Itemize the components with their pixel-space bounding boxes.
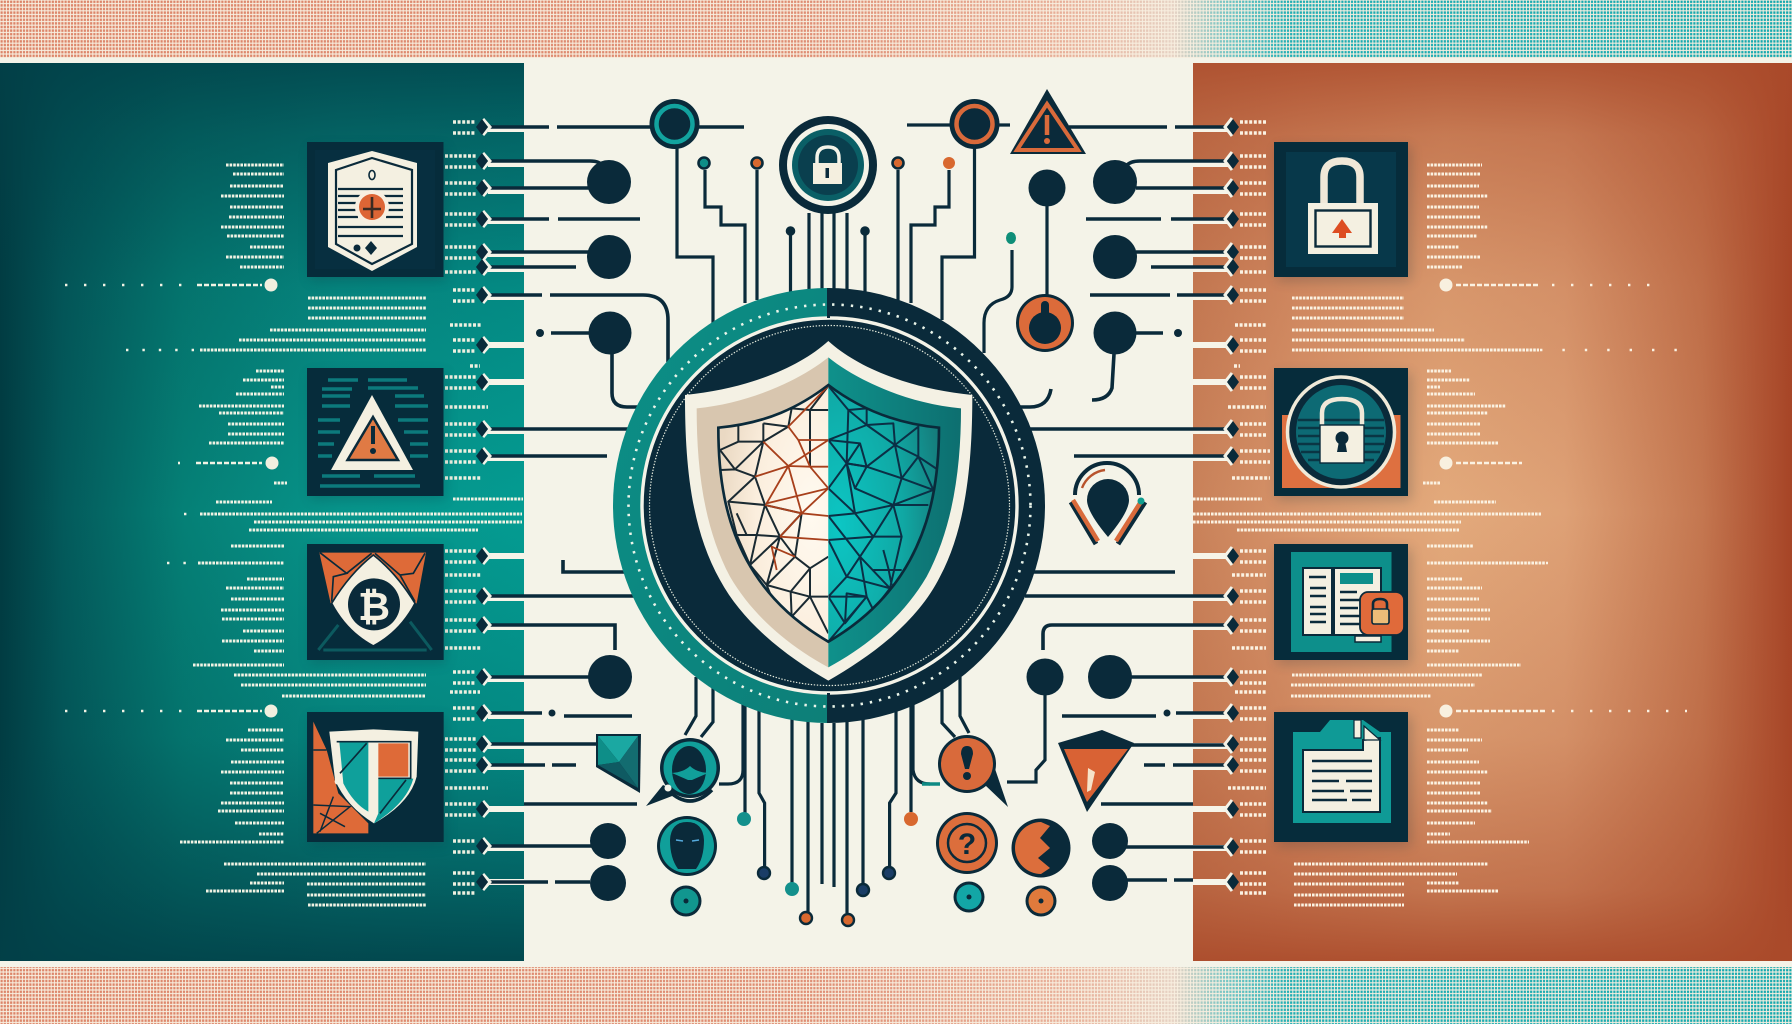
panel: rust right xyxy=(1193,63,1792,961)
icon: orange keyhole node xyxy=(1016,294,1074,352)
tile: book with lock badge xyxy=(1274,544,1408,660)
icon: split broken badge xyxy=(1012,818,1070,878)
connector traces: top xyxy=(677,125,1047,353)
mesh outline xyxy=(718,385,939,642)
connector traces: left xyxy=(490,127,744,882)
icon: small orange target xyxy=(1026,886,1056,916)
panel: teal left xyxy=(0,63,524,961)
icon: horseshoe pin xyxy=(1071,463,1145,544)
shield outer rim xyxy=(685,341,972,681)
central emblem xyxy=(613,288,1045,723)
tile: bitcoin eye xyxy=(307,544,444,660)
ring: teal half xyxy=(613,288,828,723)
icon: orange question badge xyxy=(936,812,998,874)
icon: teal kite xyxy=(596,734,641,793)
icon: padlock medallion xyxy=(779,116,877,214)
row markers: left xyxy=(476,119,490,890)
tile: document shield xyxy=(307,142,444,277)
ring: navy half xyxy=(828,288,1045,723)
top halftone band xyxy=(0,0,1792,58)
shield xyxy=(685,341,972,681)
icon: small teal target xyxy=(954,882,984,912)
tile: warning triangle xyxy=(307,368,444,496)
row markers: right xyxy=(1225,118,1239,891)
mesh: left half xyxy=(718,385,828,642)
tile: cracked shield xyxy=(307,712,444,842)
shield bevel: beige xyxy=(697,357,828,667)
icon: teal speech face xyxy=(646,738,720,806)
shield bevel: teal xyxy=(828,357,961,667)
text lines xyxy=(338,189,403,236)
bottom halftone band xyxy=(0,967,1792,1024)
white halos of connector lines on panels xyxy=(488,129,1228,882)
white ring xyxy=(642,318,1017,693)
mesh: right half xyxy=(828,385,939,642)
icon: warning triangle xyxy=(1010,89,1086,154)
node circles: left xyxy=(536,160,632,901)
connector traces: bottom xyxy=(685,677,1045,913)
code rows xyxy=(318,380,428,486)
tile: bitcoin eye: ₿ xyxy=(358,585,390,629)
sparse dotted leaders: right panel xyxy=(1456,285,1687,711)
icon: orange alert speech bubble xyxy=(938,735,1008,807)
tile: padlock alert xyxy=(1274,142,1408,277)
icon: orange arrowhead xyxy=(1058,730,1134,812)
trace end dots: top xyxy=(698,157,1016,244)
trace end dots: bottom xyxy=(737,812,918,926)
fine inner dotted ring xyxy=(650,326,1010,686)
icon: teal ring node xyxy=(650,99,700,149)
pointer dots: left panel xyxy=(264,278,278,718)
tile: document folder xyxy=(1274,712,1408,842)
icon: small teal dot xyxy=(670,886,702,916)
connector traces: right xyxy=(1011,127,1233,880)
microtext rows: left panel xyxy=(180,165,523,905)
tile: round padlock xyxy=(1274,368,1408,496)
centre seam xyxy=(827,288,830,723)
icon: orange ring node xyxy=(950,99,1000,149)
alert disc xyxy=(355,190,389,224)
node circles: right xyxy=(1026,160,1182,901)
icon: teal hooded face xyxy=(657,816,717,876)
marker microtext: right panel xyxy=(1228,122,1270,893)
shield badge xyxy=(328,151,417,271)
dotted rim xyxy=(628,304,1030,706)
microtext rows: right panel xyxy=(1193,165,1545,905)
icon: orange question badge: ? xyxy=(958,828,976,861)
inner disc xyxy=(644,320,1016,692)
sparse dotted leaders: left panel xyxy=(65,285,262,711)
pointer dots: right panel xyxy=(1440,278,1452,718)
marker microtext: left panel xyxy=(445,122,488,893)
tile shadows xyxy=(310,147,1411,846)
